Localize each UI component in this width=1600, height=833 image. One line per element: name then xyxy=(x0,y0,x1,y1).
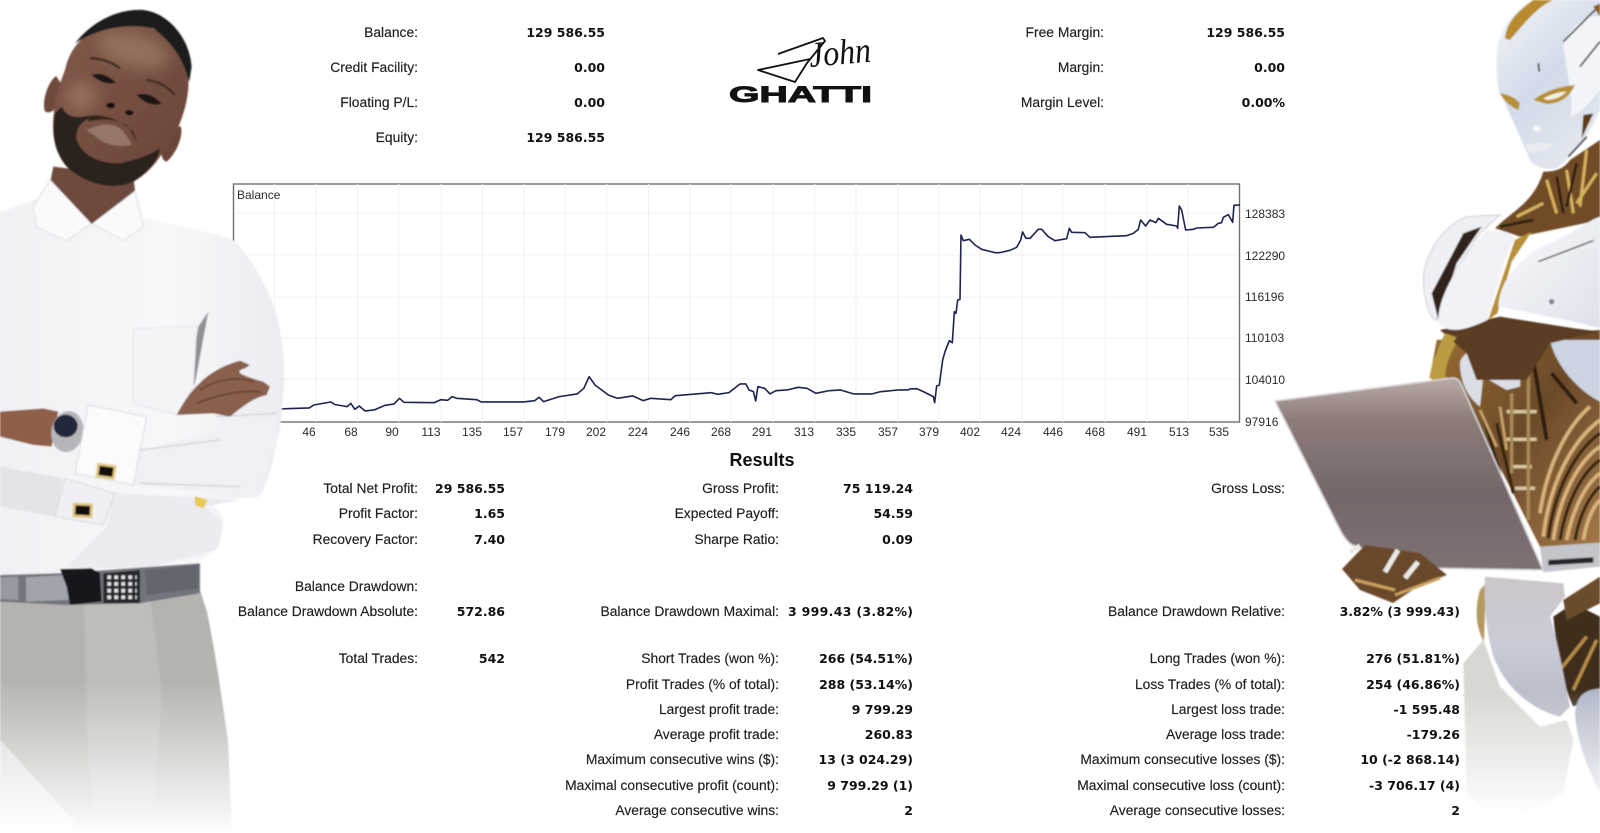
row: equity xyxy=(376,129,605,145)
x axis labels: 335 xyxy=(836,425,856,439)
row: recovery factor: 7.40 xyxy=(474,532,505,547)
row: largest loss trade xyxy=(1171,701,1460,717)
y axis labels: 122290 xyxy=(1245,249,1285,263)
row: maximum consecutive wins: Maximum consecutive wins ($): xyxy=(586,751,779,767)
left shoulder xyxy=(1423,215,1500,320)
row: balance xyxy=(364,24,605,40)
row: floating P/L: 0.00 xyxy=(574,95,605,110)
laptop base xyxy=(1540,543,1600,572)
eyes and brows xyxy=(92,74,116,83)
row: margin xyxy=(1058,59,1285,75)
panel: balance chart xyxy=(234,184,1285,439)
row: credit facility: Credit Facility: xyxy=(330,59,418,75)
x axis labels: 268 xyxy=(711,425,731,439)
row: loss trades: Loss Trades (% of total): xyxy=(1135,676,1285,692)
row: balance drawdown maximal: Balance Drawdown Maximal: xyxy=(600,603,779,619)
row: gross profit xyxy=(702,480,913,496)
row: maximum consecutive losses xyxy=(1080,751,1460,767)
cufflinks xyxy=(74,464,115,517)
row: total net profit: 29 586.55 xyxy=(435,481,505,496)
lower fringe xyxy=(1463,640,1573,827)
row: long trades: Long Trades (won %): xyxy=(1150,650,1285,666)
wordmark: GHATTI xyxy=(729,82,872,107)
row: margin: 0.00 xyxy=(1254,60,1285,75)
lower torso band xyxy=(1440,317,1600,380)
x axis labels: 113 xyxy=(421,425,441,439)
shirt folds, arms and accessories xyxy=(0,312,277,605)
row: floating P/L xyxy=(340,94,605,110)
x axis labels: 202 xyxy=(586,425,606,439)
row: gross loss: Gross Loss: xyxy=(1211,480,1285,496)
hip and thigh xyxy=(1463,577,1600,827)
row: free margin xyxy=(1026,24,1285,40)
account summary left xyxy=(330,24,605,145)
row: total net profit xyxy=(323,480,505,496)
row: gross profit: 75 119.24 xyxy=(843,481,913,496)
torso mechanics xyxy=(1429,330,1600,572)
right shoulder plate xyxy=(1498,217,1600,328)
account summary right xyxy=(1021,24,1285,110)
x axis labels: 424 xyxy=(1001,425,1021,439)
x axis labels: 68 xyxy=(344,425,358,439)
row: average consecutive losses: Average consecutive losses: xyxy=(1110,802,1285,818)
face xyxy=(53,21,188,188)
row: average loss trade xyxy=(1166,726,1460,742)
row: balance drawdown maximal: 3 999.43 (3.82%) xyxy=(788,604,913,619)
row: average profit trade xyxy=(654,726,913,742)
x axis labels: 446 xyxy=(1043,425,1063,439)
gold stripe xyxy=(1488,232,1532,320)
y axis labels: 116196 xyxy=(1245,290,1284,304)
ears xyxy=(44,76,63,112)
hair xyxy=(75,10,192,82)
row: maximal consecutive loss: Maximal consecutive loss (count): xyxy=(1077,777,1285,793)
x axis labels: 491 xyxy=(1127,425,1147,439)
row: average consecutive wins: Average consecutive wins: xyxy=(615,802,779,818)
beard xyxy=(54,107,160,186)
neck xyxy=(1495,140,1600,237)
row: profit trades: Profit Trades (% of total): xyxy=(626,676,779,692)
x axis labels: 157 xyxy=(503,425,523,439)
row: profit factor: Profit Factor: xyxy=(339,505,418,521)
row: credit facility: 0.00 xyxy=(574,60,605,75)
row: margin: Margin: xyxy=(1058,59,1104,75)
figure: man in white shirt xyxy=(0,10,284,833)
results column 1 xyxy=(238,480,505,666)
head and collar xyxy=(33,10,192,241)
row: balance: 129 586.55 xyxy=(526,25,605,40)
row: balance drawdown relative: Balance Drawdown Relative: xyxy=(1108,603,1285,619)
x axis labels: 90 xyxy=(385,425,399,439)
row: balance drawdown heading: Balance Drawdown: xyxy=(295,578,418,594)
tag xyxy=(195,496,207,509)
row: total trades xyxy=(339,650,505,666)
row: maximal consecutive profit xyxy=(565,777,913,793)
row: profit trades: 288 (53.14%) xyxy=(819,677,913,692)
row: margin level xyxy=(1021,94,1285,110)
x axis labels: 135 xyxy=(462,425,482,439)
row: expected payoff xyxy=(675,505,913,521)
y axis labels: 128383 xyxy=(1245,207,1285,221)
fold shading xyxy=(187,312,208,400)
lower cuff xyxy=(55,478,115,525)
row: sharpe ratio xyxy=(694,531,913,547)
x axis labels: 535 xyxy=(1209,425,1229,439)
row: balance drawdown absolute xyxy=(238,603,505,619)
row: largest profit trade: Largest profit trade: xyxy=(659,701,779,717)
row: gross profit: Gross Profit: xyxy=(702,480,779,496)
row: free margin: 129 586.55 xyxy=(1206,25,1285,40)
row: profit factor xyxy=(339,505,505,521)
trousers xyxy=(0,590,232,833)
row: average loss trade: -179.26 xyxy=(1407,727,1460,742)
nose xyxy=(103,98,137,117)
laptop lid xyxy=(1275,378,1543,570)
row: largest loss trade: Largest loss trade: xyxy=(1171,701,1285,717)
x axis labels: 468 xyxy=(1085,425,1105,439)
row: equity: 129 586.55 xyxy=(526,130,605,145)
row: profit factor: 1.65 xyxy=(474,506,505,521)
lips xyxy=(87,125,132,146)
row: largest loss trade: -1 595.48 xyxy=(1394,702,1460,717)
logo xyxy=(729,30,872,107)
left forearm xyxy=(0,408,58,447)
row: short trades: Short Trades (won %): xyxy=(641,650,779,666)
row: short trades: 266 (54.51%) xyxy=(819,651,913,666)
row: maximum consecutive losses: Maximum consecutive losses ($): xyxy=(1080,751,1285,767)
x axis labels: 357 xyxy=(878,425,898,439)
chest plate xyxy=(1550,340,1600,402)
y axis labels: 110103 xyxy=(1245,331,1284,345)
row: largest profit trade: 9 799.29 xyxy=(852,702,913,717)
results column 3 xyxy=(1077,480,1460,818)
row: balance drawdown absolute: Balance Drawdown Absolute: xyxy=(238,603,418,619)
x axis labels: 513 xyxy=(1169,425,1189,439)
row: total net profit: Total Net Profit: xyxy=(323,480,418,496)
row: expected payoff: 54.59 xyxy=(873,506,913,521)
gold strip xyxy=(1477,583,1486,642)
hip plate xyxy=(1485,577,1570,717)
x axis labels: 224 xyxy=(628,425,648,439)
right hand xyxy=(177,361,270,417)
x axis labels: 246 xyxy=(670,425,690,439)
x axis labels: 291 xyxy=(752,425,772,439)
row: short trades xyxy=(641,650,913,666)
row: expected payoff: Expected Payoff: xyxy=(675,505,779,521)
row: average loss trade: Average loss trade: xyxy=(1166,726,1285,742)
signature name: John xyxy=(807,30,872,75)
row: balance drawdown absolute: 572.86 xyxy=(457,604,505,619)
x axis labels: 46 xyxy=(302,425,316,439)
row: credit facility xyxy=(330,59,605,75)
signature flourish xyxy=(758,38,825,82)
row: loss trades xyxy=(1135,676,1460,692)
row: largest profit trade xyxy=(659,701,913,717)
gear xyxy=(1553,603,1600,707)
row: average consecutive wins xyxy=(615,802,913,818)
row: total trades: Total Trades: xyxy=(339,650,418,666)
robot hand xyxy=(1342,545,1447,603)
row: equity: Equity: xyxy=(376,129,418,145)
x axis labels: 379 xyxy=(919,425,939,439)
row: average consecutive losses: 2 xyxy=(1451,803,1460,818)
row: loss trades: 254 (46.86%) xyxy=(1366,677,1460,692)
balance line xyxy=(279,205,1240,411)
row: maximum consecutive wins: 13 (3 024.29) xyxy=(819,752,913,767)
y axis labels xyxy=(1245,207,1285,429)
x axis labels: 402 xyxy=(960,425,980,439)
watch xyxy=(48,409,87,455)
row: maximum consecutive losses: 10 (-2 868.14) xyxy=(1360,752,1460,767)
belt xyxy=(0,563,200,605)
shoulders, neck and head xyxy=(1423,0,1600,380)
lower fade xyxy=(0,680,245,833)
row: average profit trade: Average profit trade: xyxy=(654,726,779,742)
row: average consecutive losses xyxy=(1110,802,1460,818)
row: maximal consecutive profit: 9 799.29 (1) xyxy=(827,778,913,793)
x axis labels: 179 xyxy=(545,425,565,439)
upper arm plate xyxy=(1460,343,1522,407)
row: recovery factor xyxy=(313,531,505,547)
row: balance: Balance: xyxy=(364,24,418,40)
row: profit trades xyxy=(626,676,913,692)
row: balance drawdown relative xyxy=(1108,603,1460,619)
helmet and face xyxy=(1497,0,1600,169)
x axis labels: 313 xyxy=(794,425,814,439)
upper cuff xyxy=(75,405,147,485)
row: long trades: 276 (51.81%) xyxy=(1366,651,1460,666)
row: maximum consecutive wins xyxy=(586,751,913,767)
y axis labels: 97916 xyxy=(1245,415,1279,429)
row: long trades xyxy=(1150,650,1460,666)
row: margin level: 0.00% xyxy=(1242,95,1285,110)
pocket xyxy=(133,326,197,415)
row: average profit trade: 260.83 xyxy=(865,727,913,742)
figure: robot with laptop xyxy=(1275,0,1600,833)
row: sharpe ratio: 0.09 xyxy=(882,532,913,547)
x axis labels xyxy=(302,425,1229,439)
row: floating P/L: Floating P/L: xyxy=(340,94,418,110)
row: average consecutive wins: 2 xyxy=(904,803,913,818)
row: balance drawdown relative: 3.82% (3 999.43) xyxy=(1340,604,1460,619)
row: maximal consecutive loss: -3 706.17 (4) xyxy=(1369,778,1460,793)
row: maximal consecutive profit: Maximal consecutive profit (count): xyxy=(565,777,779,793)
shirt xyxy=(0,181,284,584)
y axis labels: 104010 xyxy=(1245,373,1285,387)
chest ladder xyxy=(1507,353,1537,520)
lower fade xyxy=(1440,690,1600,815)
results heading: Results xyxy=(729,450,795,470)
thigh xyxy=(1575,688,1600,793)
row: recovery factor: Recovery Factor: xyxy=(313,531,418,547)
row: maximal consecutive loss xyxy=(1077,777,1460,793)
left gold ring xyxy=(1429,340,1458,378)
row: sharpe ratio: Sharpe Ratio: xyxy=(694,531,779,547)
row: margin level: Margin Level: xyxy=(1021,94,1104,110)
row: free margin: Free Margin: xyxy=(1026,24,1104,40)
results column 2 xyxy=(565,480,913,818)
row: balance drawdown maximal xyxy=(600,603,913,619)
row: total trades: 542 xyxy=(479,651,505,666)
chart title: Balance xyxy=(237,188,281,202)
wiring streaks xyxy=(1540,407,1600,540)
